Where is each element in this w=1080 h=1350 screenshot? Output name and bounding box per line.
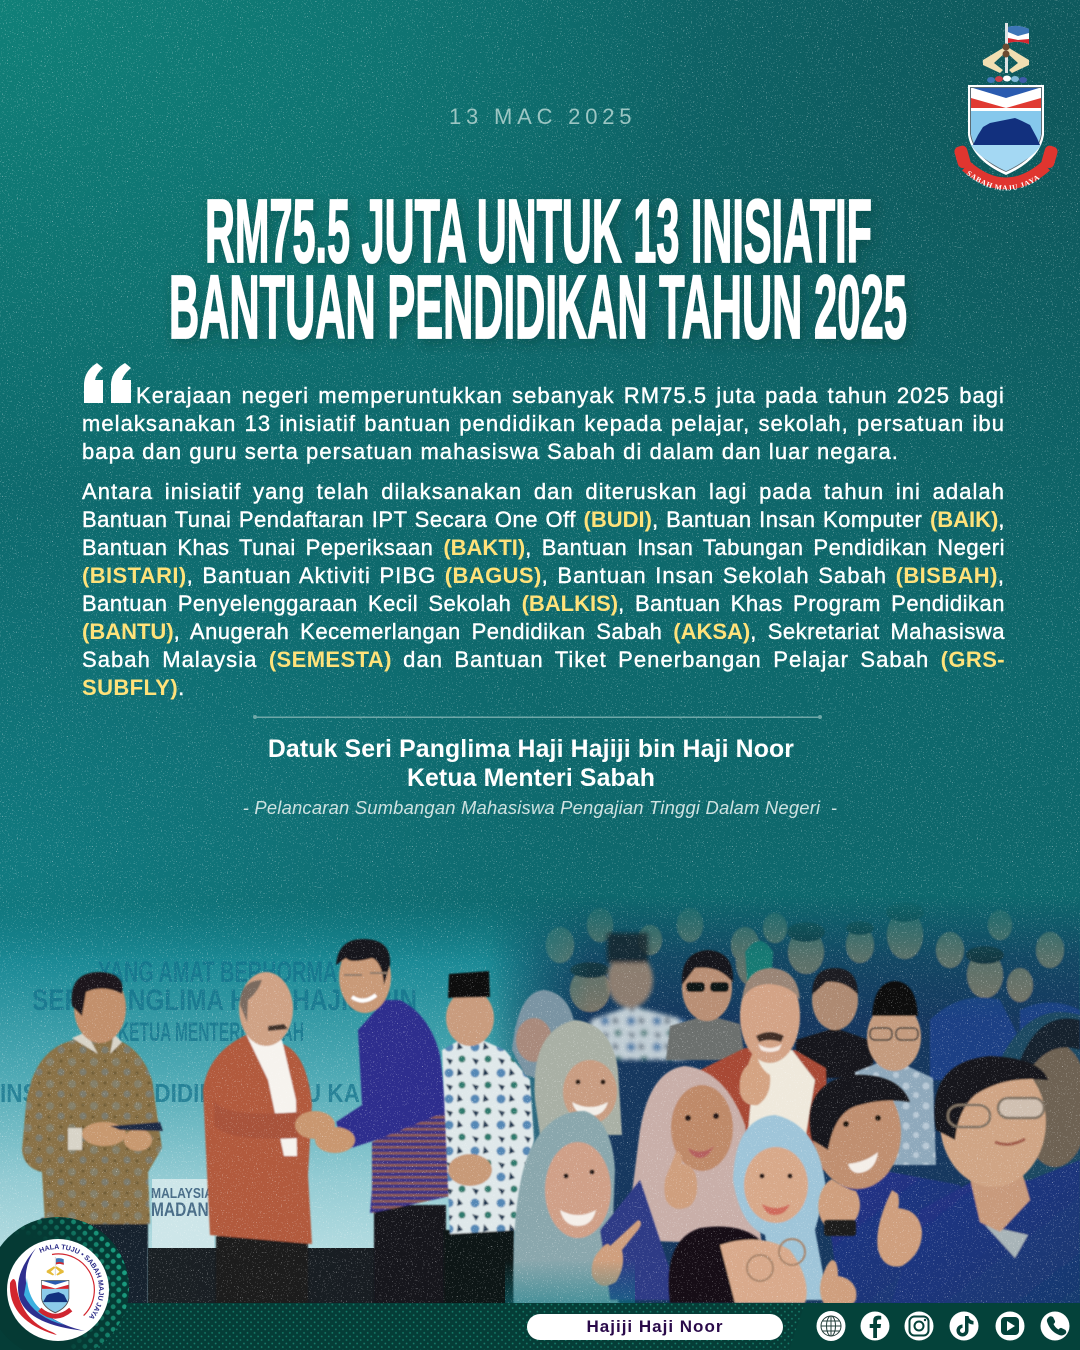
stage backdrop (0, 918, 556, 1303)
scroll with motto: SABAH MAJU JAYA (966, 171, 1040, 190)
badge: Hala Tuju logo (0, 1217, 129, 1350)
watch on student wrist (824, 1220, 856, 1236)
bottom bar (0, 1303, 1080, 1350)
backdrop lettering (0, 956, 417, 1221)
text block: second paragraph: Bantuan Khas Tunai Peperiksaan (BAKTI), Bantuan Insan Tabungan Pendidikan Negeri (82, 535, 1005, 560)
shield (968, 85, 1044, 175)
person: man in black shirt (796, 968, 875, 1078)
text block: second paragraph: (BISTARI), Bantuan Aktiviti PIBG (BAGUS), Bantuan Insan Sekolah Sabah (BISBAH), (82, 563, 1005, 588)
text block: second paragraph: (BANTU), Anugerah Kecemerlangan Pendidikan Sabah (AKSA), Sekretariat Mahasiswa (82, 619, 1005, 644)
icon: video (996, 1312, 1024, 1340)
scroll with motto (954, 146, 1058, 190)
person: student centre right (810, 1075, 990, 1303)
coat of arms: Sabah (954, 23, 1058, 190)
text block: second paragraph: SUBFLY). (82, 675, 185, 700)
person: man in red jacket (203, 972, 335, 1308)
person: woman in pale blue hijab (733, 1115, 828, 1300)
person: man in batik shirt (22, 972, 163, 1308)
text block: second paragraph (82, 479, 1005, 700)
backdrop lettering: MALAYSIA (151, 1185, 213, 1202)
backdrop lettering: INSTITUT PENDIDIKAN GURU KA (0, 1078, 360, 1108)
attribution: speaker role: Ketua Menteri Sabah (407, 765, 655, 792)
person: man with songkok in pale blue shirt (855, 981, 936, 1165)
quote mark (84, 363, 131, 403)
person: student with glasses at front (890, 1056, 1080, 1308)
badge: Hala Tuju logo: HALA TUJU • SABAH MAJU JAYA (39, 1244, 104, 1319)
beads (987, 76, 1027, 83)
text block: first paragraph: Kerajaan negeri memperuntukkan sebanyak RM75.5 juta pada tahun 2025 bagi (136, 383, 1005, 408)
person: student at far right (1000, 1012, 1080, 1190)
name pill (527, 1314, 783, 1340)
arms holding pole (983, 44, 1029, 73)
text block: second paragraph: Sabah Malaysia (SEMESTA) dan Bantuan Tiket Penerbangan Pelajar Sabah (GRS- (82, 647, 1005, 672)
person: woman in pink hijab (626, 1066, 762, 1245)
person: man with sunglasses (666, 950, 745, 1060)
backdrop lettering: MADANI (151, 1200, 213, 1221)
icon: tiktok (950, 1312, 978, 1340)
text block: first paragraph (82, 383, 1005, 464)
attribution: speaker name: Datuk Seri Panglima Haji Hajiji bin Haji Noor (268, 736, 794, 763)
person: man in floral shirt with songkok (442, 971, 534, 1308)
title (169, 182, 907, 358)
icon: phone (1040, 1312, 1070, 1340)
hands: thumbs up and finger hearts (592, 1152, 922, 1304)
backdrop lettering: KETUA MENTERI SABAH (118, 1017, 304, 1047)
text block: second paragraph: Antara inisiatif yang telah dilaksanakan dan diteruskan lagi pada tahun ini adalah (82, 479, 1005, 504)
person: girl with glasses at bottom (669, 1226, 807, 1303)
backdrop lettering: YANG AMAT BERHORMAT (98, 956, 348, 989)
small crest (40, 1257, 71, 1316)
icon: instagram (904, 1312, 934, 1340)
date: 13 MAC 2025 (449, 104, 636, 129)
backdrop lettering: SERI PANGLIMA HAJI HAJIJI BIN (32, 984, 417, 1017)
person: young woman in back with grey hijab (512, 990, 576, 1085)
tinted overlay on lower photo (505, 1260, 635, 1305)
text block: first paragraph: bapa dan guru serta persatuan mahasiswa Sabah di dalam dan luar negara. (82, 439, 899, 464)
person: man in floral shirt at back (590, 933, 686, 1060)
person: woman in grey hijab (513, 1111, 680, 1340)
photo: presentation on stage and student group (0, 906, 1080, 1303)
text block: first paragraph: melaksanakan 13 inisiatif bantuan pendidikan kepada pelajar, sekolah, persatuan ibu (82, 411, 1005, 436)
social icons (816, 1311, 1070, 1341)
text block: second paragraph: Bantuan Penyelenggaraan Kecil Sekolah (BALKIS), Bantuan Khas Program Pendidikan (82, 591, 1005, 616)
person: student in blue baju (315, 939, 452, 1308)
name pill: Hajiji Haji Noor (587, 1317, 723, 1336)
flag and pole (1005, 23, 1029, 73)
icon: facebook (860, 1312, 890, 1340)
crowd behind students (480, 895, 1080, 1310)
person: woman in beige hijab (534, 1020, 622, 1135)
text block: second paragraph: Bantuan Tunai Pendaftaran IPT Secara One Off (BUDI), Bantuan Insan Komputer (BAIK), (82, 507, 1005, 532)
divider (253, 715, 822, 719)
attribution: event: - Pelancaran Sumbangan Mahasiswa Pengajian Tinggi Dalam Negeri - (243, 797, 837, 818)
icon: website (816, 1311, 846, 1341)
person: chief minister in red jacket (695, 968, 830, 1170)
